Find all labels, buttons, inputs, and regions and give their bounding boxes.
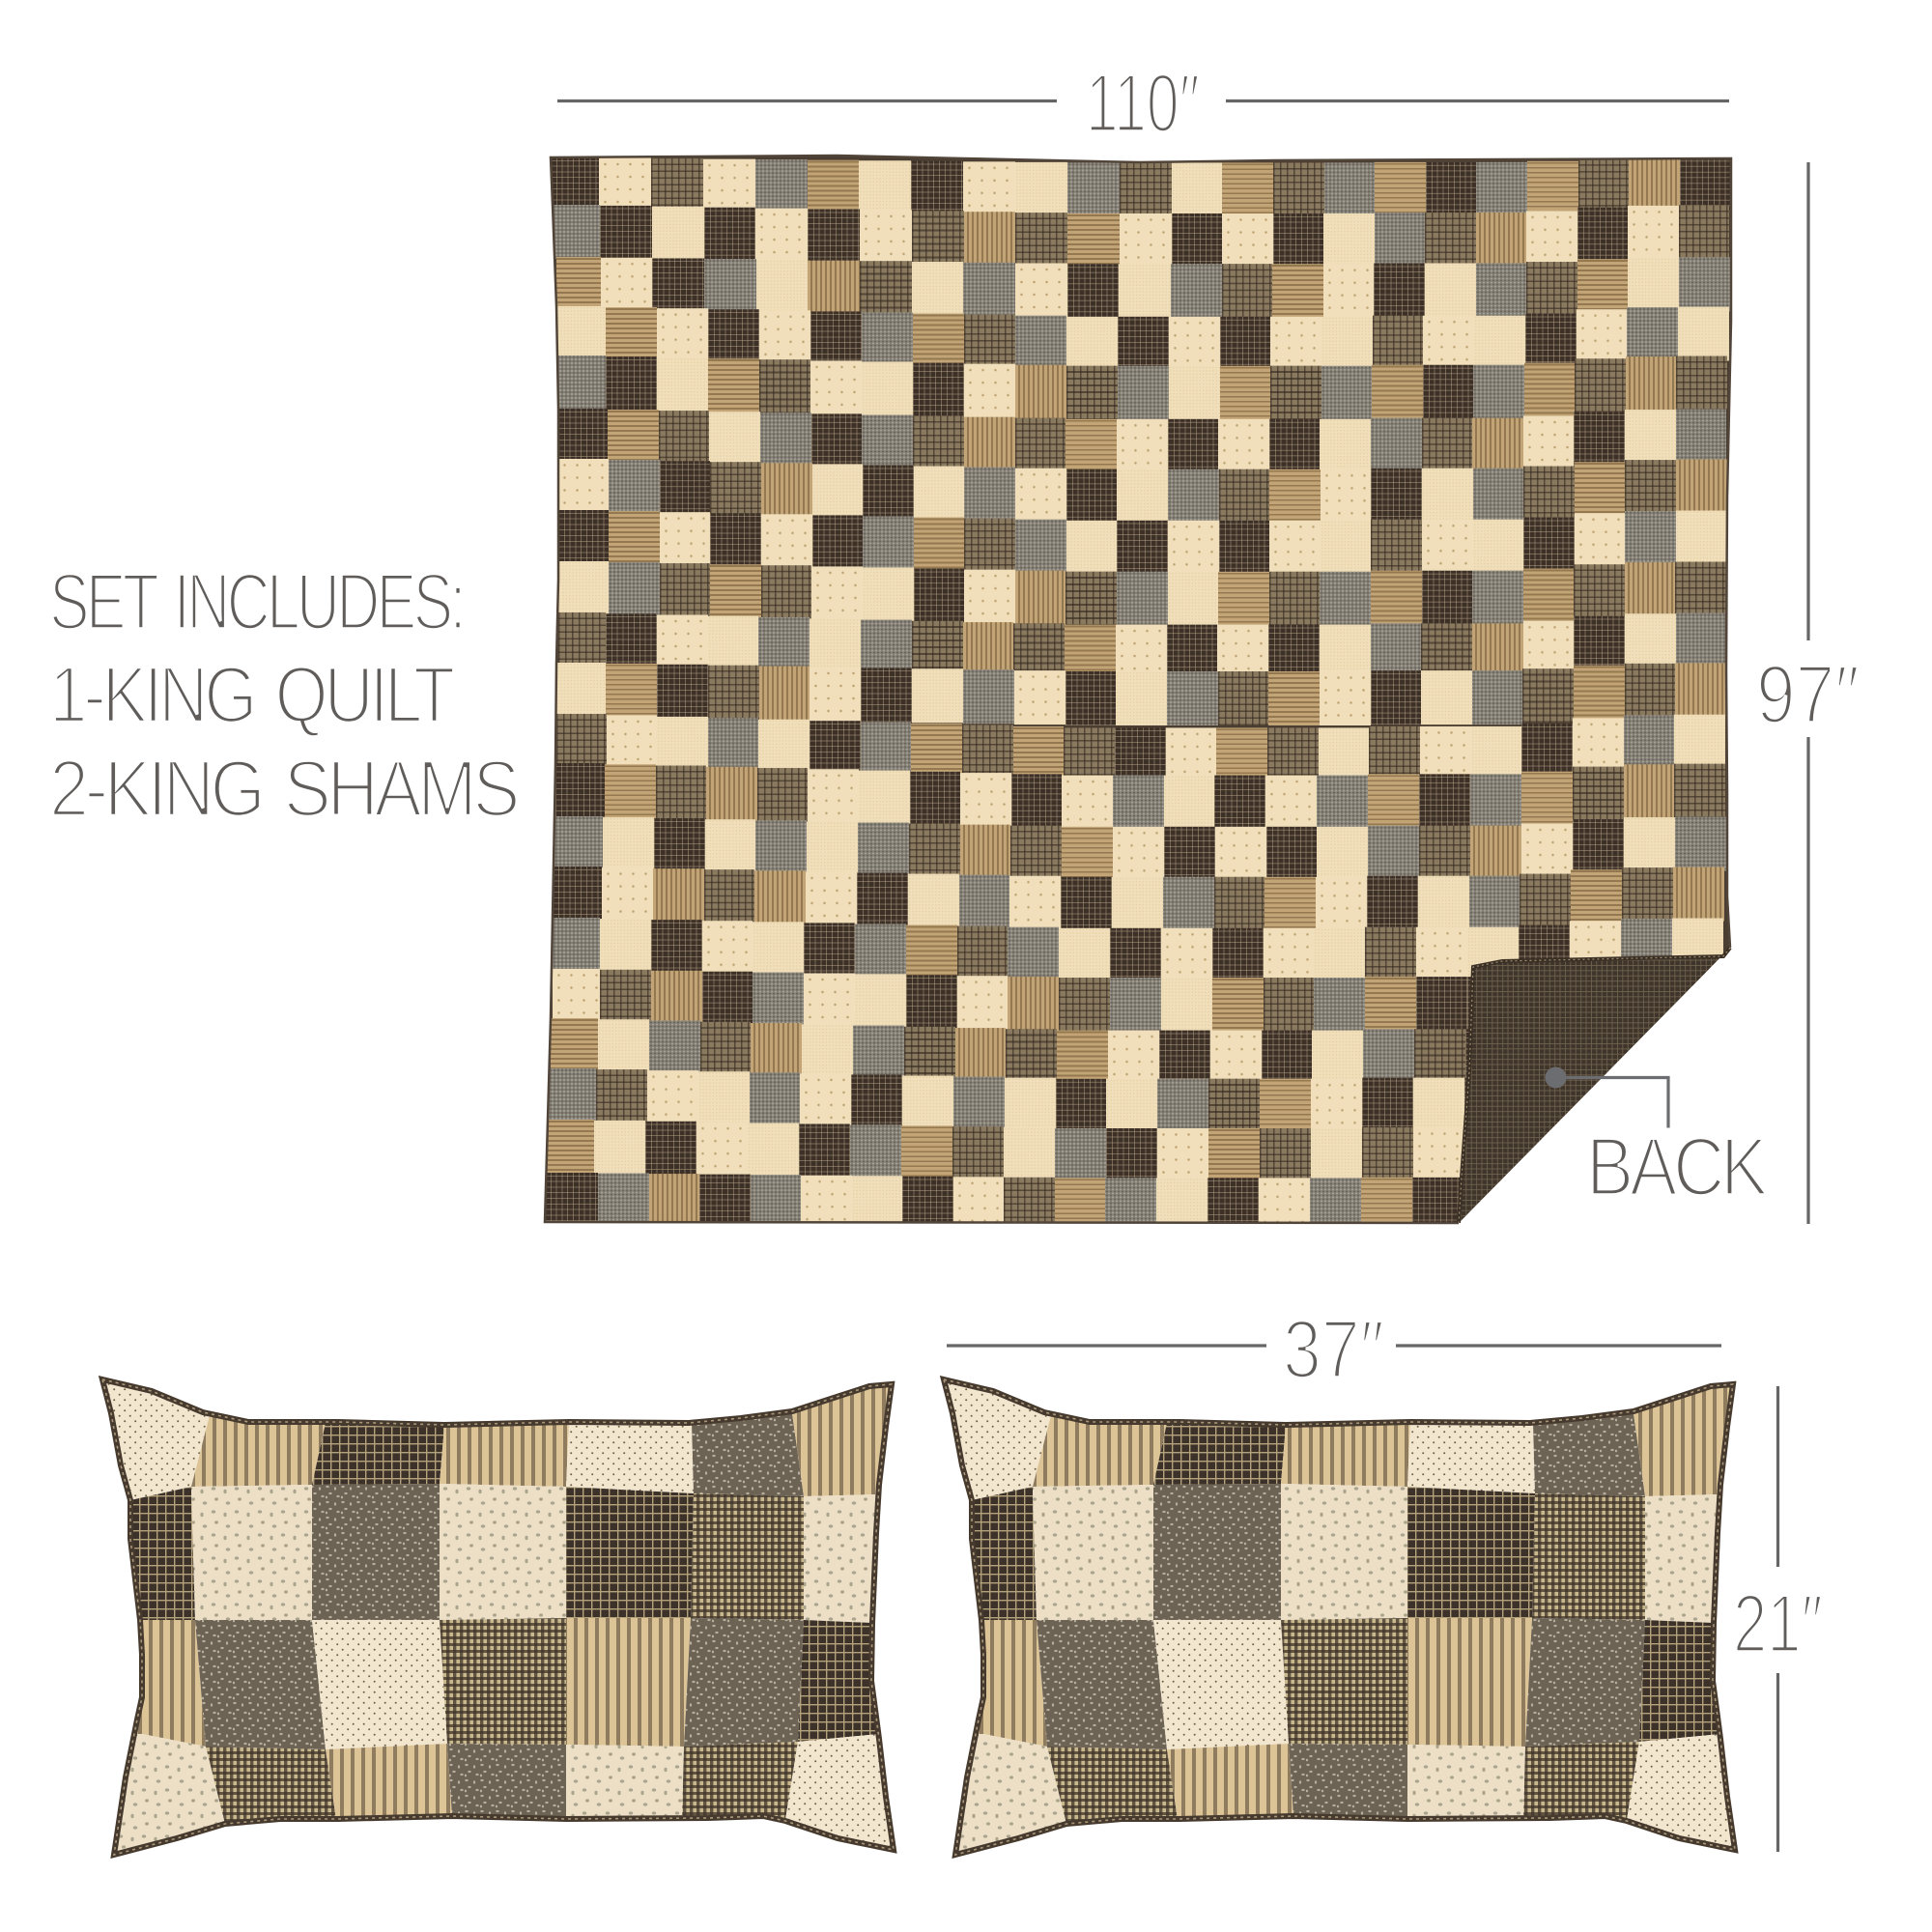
- dimension: quilt height 97 inches: 97″: [1756, 649, 1860, 741]
- quilt patchwork cells: [536, 145, 1739, 1232]
- text block: set includes: [49, 556, 517, 833]
- panel: king quilt: [543, 155, 1733, 1225]
- text block: set includes: 2-KING SHAMS: [49, 744, 517, 833]
- dimension: sham width 37 inches: 37″: [1283, 1304, 1384, 1396]
- text block: set includes: 1-KING QUILT: [49, 649, 454, 740]
- text block: set includes: SET INCLUDES:: [49, 556, 463, 646]
- quilt binding and folded back corner: [543, 155, 1733, 1225]
- pillow sham left: [87, 1362, 908, 1864]
- dimension: quilt width 110 inches: 110″: [1086, 58, 1200, 150]
- dimension: sham height 21 inches: 21″: [1733, 1578, 1823, 1670]
- callout: back of quilt: [1546, 1066, 1768, 1213]
- pillow sham right: [928, 1362, 1749, 1864]
- callout: back of quilt: BACK: [1586, 1122, 1768, 1213]
